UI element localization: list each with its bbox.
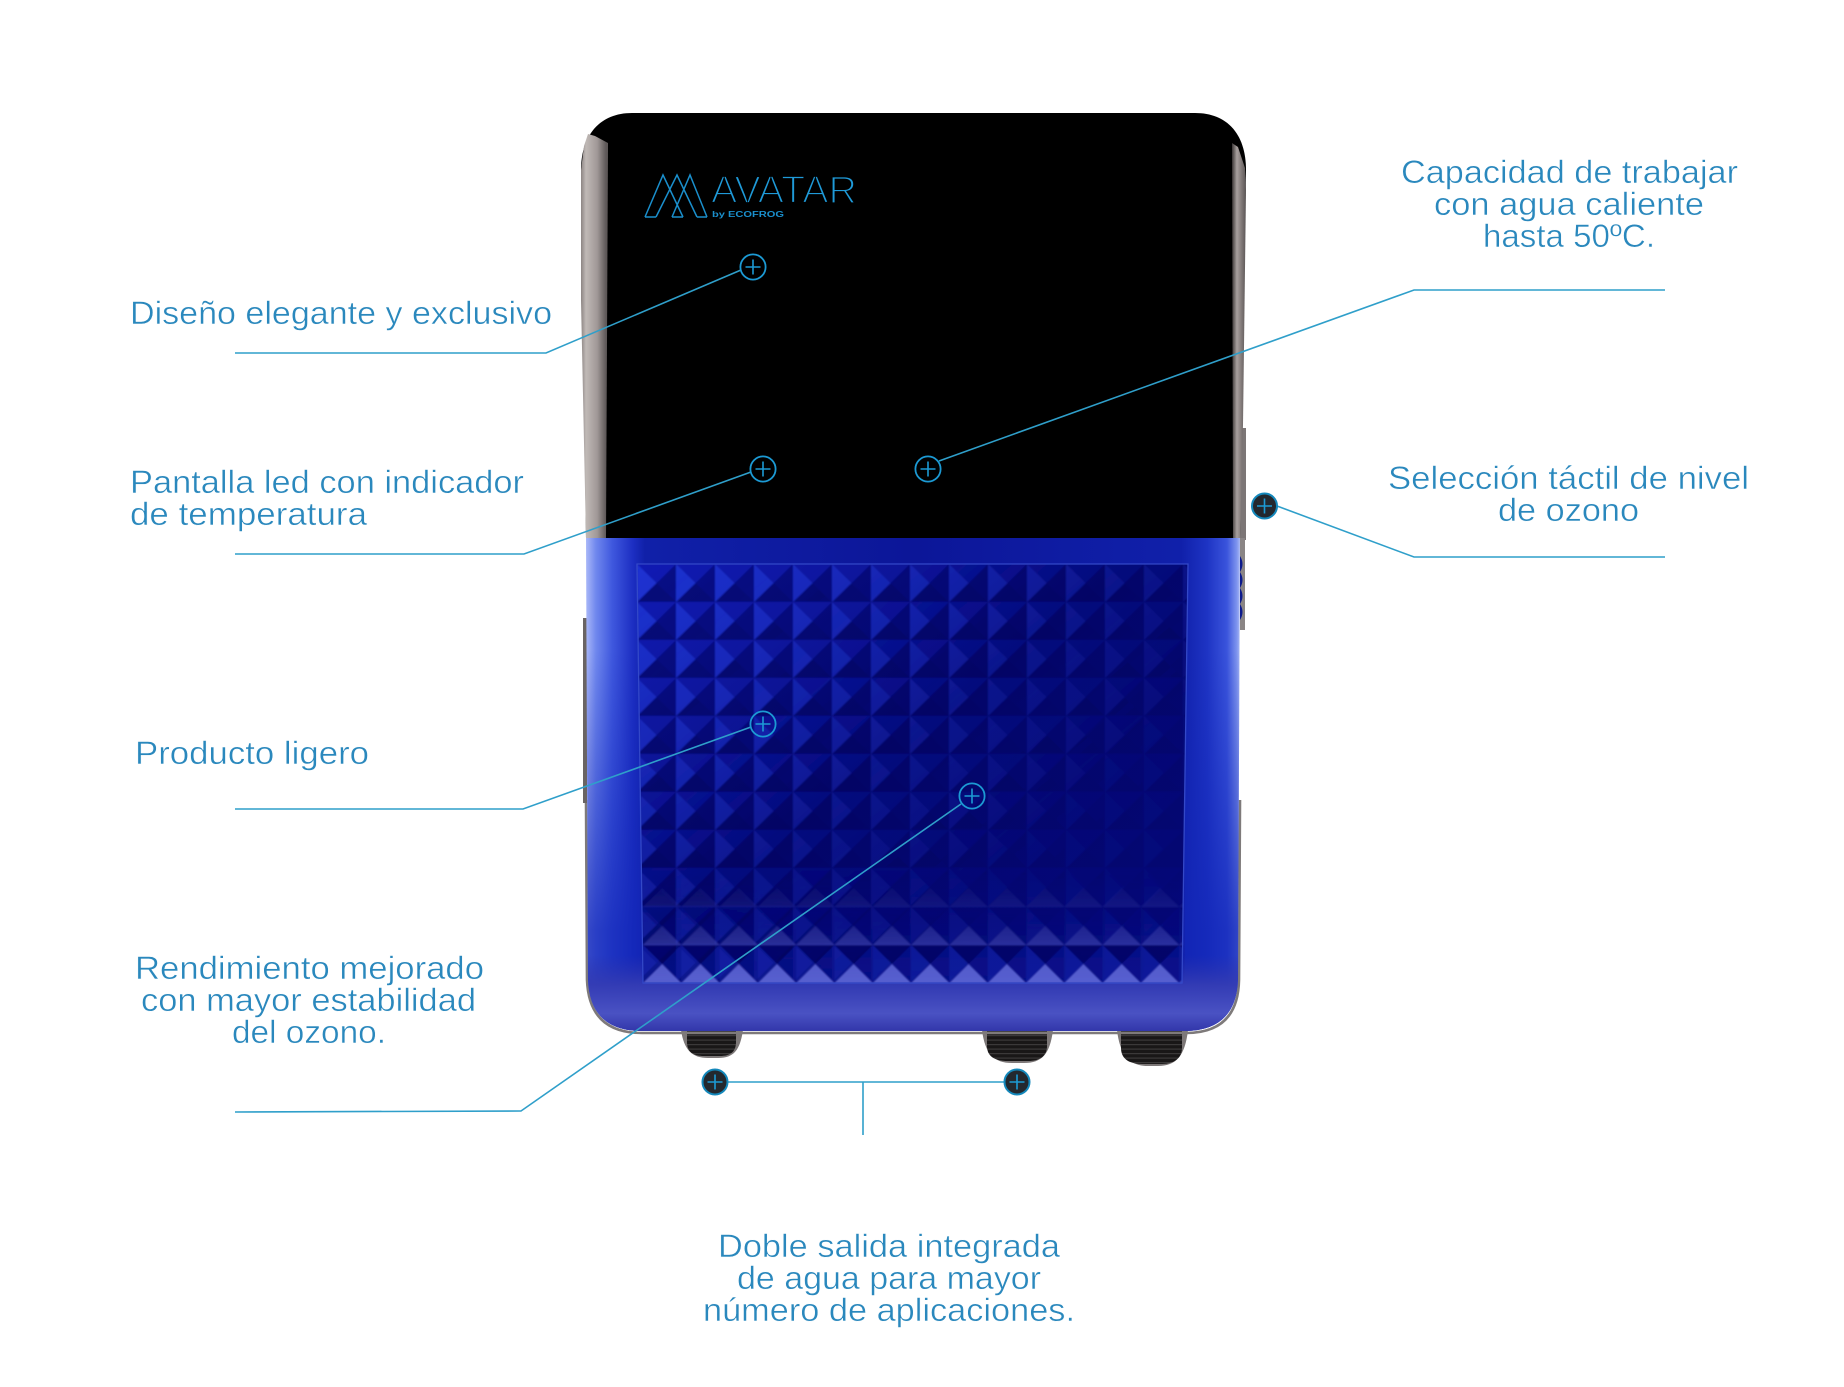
plus icon xyxy=(750,456,776,482)
plus icon xyxy=(750,711,776,737)
callout: diseño elegante xyxy=(130,254,766,353)
label text xyxy=(1388,460,1749,528)
logo subline: by ECOFROG xyxy=(712,210,784,219)
blue bottom highlight xyxy=(588,964,1238,1031)
product device xyxy=(581,113,1246,1066)
connector left xyxy=(681,1030,743,1058)
logo wordmark: AVATAR xyxy=(711,169,857,212)
plus icon xyxy=(740,254,766,280)
left side tab xyxy=(583,618,587,803)
connector middle xyxy=(982,1030,1053,1063)
left silver strip xyxy=(581,134,608,538)
leader line xyxy=(235,472,751,554)
leader line xyxy=(235,727,751,809)
plus icon xyxy=(1252,494,1277,518)
right side buttons xyxy=(1240,538,1245,630)
label text xyxy=(1401,154,1738,254)
leader line xyxy=(1277,506,1665,557)
lower edge shading xyxy=(586,650,1240,1032)
callout: pantalla led xyxy=(130,456,776,554)
label text: Rendimiento mejorado xyxy=(135,950,484,986)
plus icon right xyxy=(1004,1070,1030,1094)
label text: Selección táctil de nivel xyxy=(1388,460,1749,496)
label text: Diseño elegante y exclusivo xyxy=(130,295,552,331)
plus icon xyxy=(959,783,985,809)
logo mountains icon xyxy=(645,175,707,217)
pyramid texture panel xyxy=(637,564,1188,983)
label text xyxy=(130,464,524,532)
side grey rim xyxy=(586,800,1240,1033)
right side grey tab xyxy=(1240,428,1246,540)
connector right xyxy=(1117,1030,1188,1066)
callout: agua caliente xyxy=(915,154,1738,482)
callout: producto ligero xyxy=(135,711,776,809)
label text: Producto ligero xyxy=(135,735,369,771)
leader line xyxy=(939,290,1665,461)
plus icon left xyxy=(702,1070,728,1094)
label text: Pantalla led con indicador xyxy=(130,464,524,500)
bottom connectors xyxy=(681,1030,1188,1066)
label text: de temperatura xyxy=(130,496,367,532)
label text: de ozono xyxy=(1498,492,1639,528)
callout: doble salida xyxy=(702,1070,1075,1328)
label text: Capacidad de trabajar xyxy=(1401,154,1738,190)
label text: con agua caliente xyxy=(1434,186,1704,222)
bracket leader lines xyxy=(727,1082,1005,1135)
leader line xyxy=(235,804,961,1112)
blue lower body xyxy=(586,538,1240,1031)
leader line xyxy=(235,270,741,353)
plus icon xyxy=(915,456,941,482)
right silver strip xyxy=(1232,143,1246,538)
label text: del ozono. xyxy=(232,1014,386,1050)
label text: hasta 50ºC. xyxy=(1483,218,1655,254)
label text: Doble salida integrada xyxy=(718,1228,1060,1264)
label text: número de aplicaciones. xyxy=(703,1292,1075,1328)
black top panel xyxy=(581,113,1246,538)
label text xyxy=(135,950,484,1050)
label text: con mayor estabilidad xyxy=(141,982,476,1018)
label text: de agua para mayor xyxy=(737,1260,1041,1296)
label text xyxy=(703,1228,1075,1328)
callout: rendimiento mejorado xyxy=(135,783,985,1112)
logo: Avatar by Ecofrog xyxy=(645,169,857,219)
callout: selección táctil xyxy=(1252,460,1749,557)
